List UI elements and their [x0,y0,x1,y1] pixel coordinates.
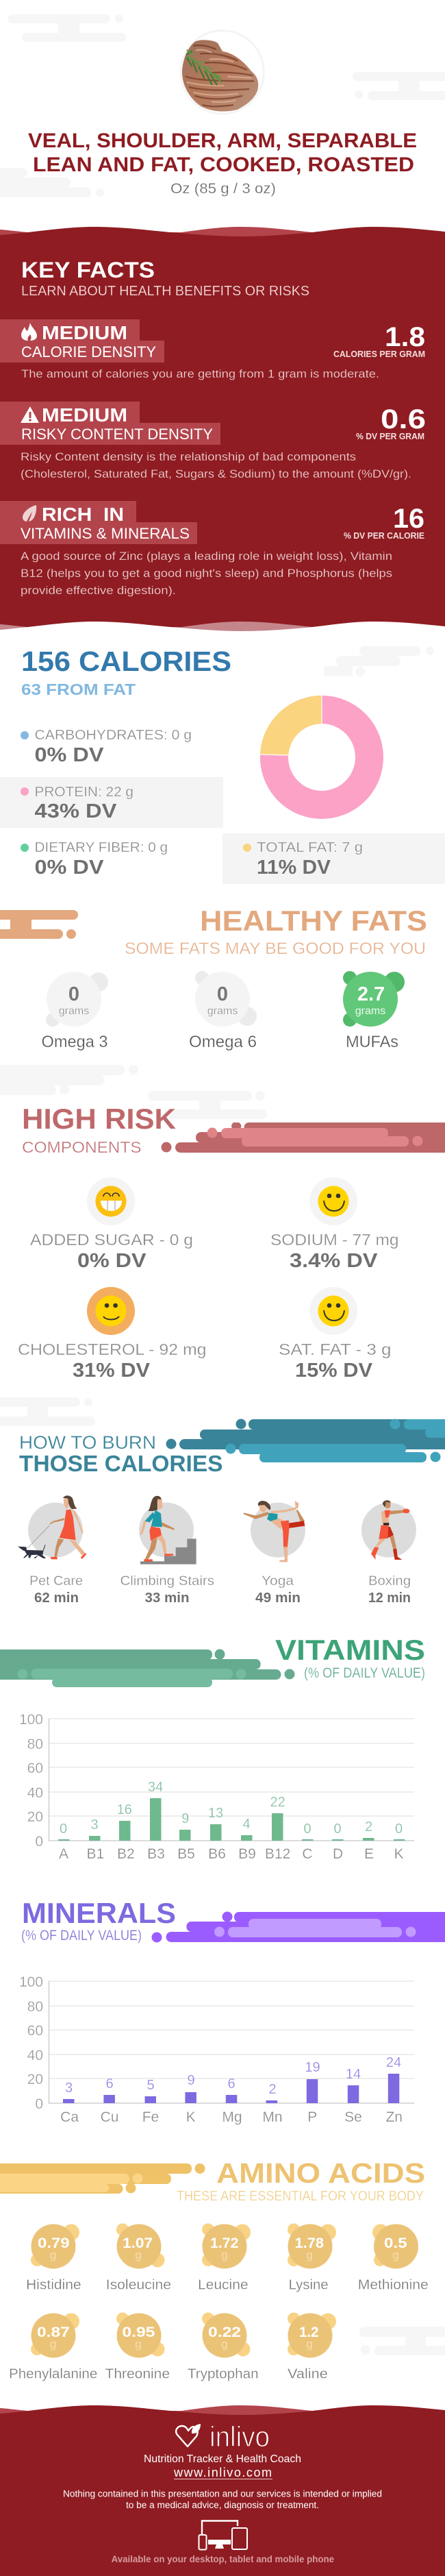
risk item: sodium [270,1177,398,1272]
icon: warning triangle [21,406,39,423]
bar chart: vitamins: 0 [395,1821,403,1837]
stat: mufas: MUFAs [346,1033,398,1051]
bar chart: minerals: 9 [187,2073,195,2088]
amino acid: isoleucine: 1.07 [123,2235,153,2251]
rating: MEDIUM [42,404,127,426]
icon: flame [21,323,37,341]
bar chart: vitamins: 2 [365,1819,372,1835]
bar chart: vitamins: 16 [117,1802,132,1817]
risk item: saturated fat: SAT. FAT - 3 g [279,1340,392,1358]
amino acid: methionine: g [392,2248,399,2261]
description: provide effective digestion). [21,584,176,597]
subheading: (% OF DAILY VALUE) [21,1928,142,1943]
availability note: Available on your desktop, tablet and mobile phone [112,2553,334,2564]
nutrient: dietary fiber: 0% DV [34,857,104,879]
risk item: cholesterol [18,1287,207,1382]
bar chart: minerals: 0 [35,2096,43,2112]
amino acid: phenylalanine: g [50,2338,56,2351]
fact: risky content density [0,402,426,480]
logo: inlivo heart and leaf [176,2420,270,2453]
bar chart: minerals: 40 [27,2048,43,2063]
bar chart: vitamins: B3 [147,1846,165,1862]
bar chart: vitamins: 0 [60,1821,67,1837]
amino acid: histidine: 0.79 [38,2235,70,2251]
fact: calorie density [0,319,425,380]
title [28,130,417,176]
bar chart: vitamins: 34 [148,1780,163,1795]
risk item: cholesterol: CHOLESTEROL - 92 mg [18,1340,207,1358]
subheading: from fat: 63 FROM FAT [21,680,136,698]
amino acid: methionine: Methionine [358,2278,429,2293]
donut chart [260,696,370,805]
stat: mufas [343,971,405,1051]
amino acid: leucine [198,2223,251,2293]
risk item: saturated fat [279,1287,392,1382]
stat: mufas: grams [355,1005,385,1017]
bar chart: minerals: 19 [305,2060,320,2075]
activity: climbing stairs [120,1496,214,1606]
activity: boxing: 12 min [368,1591,411,1606]
unit: CALORIES PER GRAM [333,349,425,359]
icon: woman in yoga pose [244,1501,305,1562]
bar chart: vitamins: B5 [177,1846,195,1862]
risk item: sodium: SODIUM - 77 mg [270,1231,398,1249]
rating: MEDIUM [42,322,127,343]
decorative header shape [152,1912,445,1942]
bar chart: vitamins: B1 [87,1846,104,1862]
icon: smiling emoji [309,1177,357,1225]
bar chart: vitamins: K [394,1846,404,1862]
panel: key facts [0,227,445,641]
amino acid: leucine: 1.72 [210,2235,238,2251]
bar chart: minerals: 100 [19,1974,43,1990]
tagline: Nutrition Tracker & Health Coach [144,2453,301,2465]
heading: vitamins: VITAMINS [275,1634,425,1666]
bar chart: minerals: Se [344,2109,362,2125]
amino acid: tryptophan: g [221,2338,228,2351]
amino acid: threonine: g [135,2338,142,2351]
fact: rich in vitamins and minerals [0,501,424,597]
bar chart: vitamins: 4 [242,1817,251,1832]
nutrient: protein: PROTEIN: 22 g [34,785,134,800]
amino acid: valine [288,2312,336,2382]
heading: healthy fats: HEALTHY FATS [200,905,427,937]
bar chart: minerals: K [186,2109,196,2125]
stat: omega 6: Omega 6 [189,1033,257,1051]
bar chart: vitamins: B9 [238,1846,256,1862]
amino acid: histidine: Histidine [26,2278,81,2293]
bar chart: vitamins: D [333,1846,343,1862]
subheading: COMPONENTS [22,1138,142,1156]
panel: footer [0,2405,445,2576]
nutrient: dietary fiber: DIETARY FIBER: 0 g [34,840,168,855]
value: 0.6 [381,404,426,434]
panel: minerals [19,1897,445,2125]
activity: boxing: Boxing [368,1574,411,1588]
value: 1.8 [385,322,425,352]
bar chart: minerals: 24 [386,2055,401,2070]
food image: grilled veal steak with rosemary [181,31,264,114]
amino acid: isoleucine: Isoleucine [106,2278,171,2293]
amino acid: lysine: 1.78 [295,2235,324,2251]
amino acid: tryptophan: 0.22 [208,2324,241,2340]
description: A good source of Zinc (plays a leading role in weight loss), Vitamin [21,550,392,563]
risk item: cholesterol: 31% DV [73,1360,151,1382]
nutrient: total fat [243,840,363,879]
panel: how to burn those calories [18,1419,445,1606]
bar chart: vitamins: 9 [181,1811,189,1826]
bar chart: minerals: 3 [65,2081,73,2096]
rating: RICH IN [42,504,124,525]
panel: vitamins [0,1634,425,1862]
bar chart: minerals: 2 [268,2082,277,2097]
description: Risky Content density is the relationship of bad components [21,450,356,463]
value: 16 [393,504,424,534]
heading: key facts: KEY FACTS [21,258,155,282]
decorative header shape [162,1123,445,1153]
bar chart: vitamins: 60 [27,1761,43,1776]
icon: smiling emoji [309,1287,357,1335]
activity: pet care: 62 min [34,1591,79,1606]
activity: boxing [361,1500,416,1606]
activity: yoga: 49 min [255,1591,301,1606]
logo: inlivo heart and leaf: inlivo [209,2420,270,2453]
nutrient: carbohydrates: CARBOHYDRATES: 0 g [34,728,192,743]
bar chart: minerals: Mn [262,2109,283,2125]
amino acid: valine: Valine [288,2367,328,2382]
bar chart: minerals: Cu [101,2109,118,2125]
decorative header shape [166,1419,445,1462]
icon: desktop, tablet and phone [199,2520,247,2549]
amino acid: threonine: Threonine [105,2367,170,2382]
amino acid: lysine [288,2223,336,2293]
description: (Cholesterol, Saturated Fat, Sugars & Sodium) to the amount (%DV/gr). [21,467,411,480]
bar chart: vitamins: 0 [35,1834,43,1850]
subheading: (% OF DAILY VALUE) [304,1665,425,1681]
bar chart: minerals: 20 [27,2072,43,2087]
stat: omega 3: grams [59,1005,89,1017]
bar chart: minerals: Zn [385,2109,403,2125]
icon: woman climbing stairs [139,1496,196,1565]
bar chart: vitamins: 80 [27,1737,43,1752]
heading: amino acids: AMINO ACIDS [216,2157,425,2189]
label: VITAMINS & MINERALS [21,525,190,542]
bar chart: vitamins: B12 [265,1846,290,1862]
decorative header shape [0,1649,294,1687]
amino acid: isoleucine: g [135,2248,142,2261]
amino acid: phenylalanine [9,2314,97,2382]
stat: omega 6 [189,971,257,1051]
icon: smiling emoji on orange [87,1287,135,1335]
bar chart: vitamins: 40 [27,1785,43,1801]
serving size: Oz (85 g / 3 oz) [170,181,276,197]
bar chart: minerals: 6 [105,2076,114,2092]
label: CALORIE DENSITY [21,343,156,360]
decorative header shape [0,910,78,939]
activity: climbing stairs: 33 min [145,1591,189,1606]
bar chart: minerals: P [307,2109,317,2125]
amino acid: lysine: Lysine [289,2278,329,2293]
bar chart: minerals: 14 [346,2067,361,2082]
description [21,550,392,597]
nutrient: dietary fiber [21,840,168,879]
icon: woman walking a dog [18,1495,86,1559]
bar chart: minerals: Mg [222,2109,242,2125]
bar chart: minerals: 60 [27,2023,43,2039]
bar chart: vitamins: E [364,1846,374,1862]
icon: leaf [23,505,36,522]
amino acid: leucine: Leucine [198,2278,249,2293]
bar chart: minerals [19,1974,414,2125]
stat: omega 6: 0 [217,983,228,1005]
nutrient: carbohydrates [21,728,192,766]
activity: yoga: Yoga [262,1574,294,1588]
unit: % DV PER GRAM [356,431,424,441]
risk item: sodium: 3.4% DV [290,1250,378,1272]
amino acid: threonine [105,2312,170,2382]
risk item: added sugar: ADDED SUGAR - 0 g [30,1231,193,1249]
amino acid: leucine: g [221,2248,228,2261]
amino acid: isoleucine [106,2223,171,2293]
panel: healthy fats [0,905,427,1051]
amino acid: valine: 1.2 [299,2324,319,2340]
stat: omega 6: grams [207,1005,238,1017]
amino acid: methionine: 0.5 [384,2235,407,2251]
heading: minerals: MINERALS [22,1897,176,1929]
amino acid: methionine [358,2224,429,2293]
heading: those calories: THOSE CALORIES [19,1451,223,1476]
panel: high risk components [18,1103,445,1382]
nutrient: total fat: 11% DV [257,857,331,879]
nutrient: protein: 43% DV [34,800,117,822]
icon: boxer punching [361,1500,416,1560]
bar chart: minerals: 5 [147,2078,155,2093]
bar chart: minerals: 6 [227,2076,236,2092]
nutrient: protein [21,785,134,822]
nutrient: carbohydrates: 0% DV [34,744,104,766]
title: LEAN AND FAT, COOKED, ROASTED [33,154,414,176]
bar chart: minerals: Fe [142,2109,159,2125]
disclaimer [63,2489,382,2510]
amino acid: tryptophan [188,2312,259,2382]
bar chart: vitamins [19,1712,414,1862]
subheading: SOME FATS MAY BE GOOD FOR YOU [125,940,426,958]
bar chart: vitamins: B6 [208,1846,226,1862]
risk item: added sugar: 0% DV [77,1250,147,1272]
activity: pet care: Pet Care [29,1574,83,1588]
activity: pet care [18,1495,86,1606]
amino acid: histidine [26,2224,81,2293]
amino acid: phenylalanine: Phenylalanine [9,2367,97,2382]
label: RISKY CONTENT DENSITY [21,426,213,443]
disclaimer: Nothing contained in this presentation and our services is intended or implied [63,2489,382,2499]
title: VEAL, SHOULDER, ARM, SEPARABLE [28,130,417,152]
amino acid: tryptophan: Tryptophan [188,2367,259,2382]
bar chart: minerals: Ca [60,2109,79,2125]
nutrient: total fat: TOTAL FAT: 7 g [257,840,363,855]
subheading: LEARN ABOUT HEALTH BENEFITS OR RISKS [21,284,309,299]
bar chart: vitamins: 20 [27,1809,43,1825]
panel: amino acids [0,2157,429,2382]
panel: calories [0,646,445,884]
bar chart: vitamins: 3 [90,1817,99,1832]
stat: omega 3 [41,972,108,1051]
stat: omega 3: 0 [68,983,79,1005]
activity: climbing stairs: Climbing Stairs [120,1574,214,1588]
amino acid: histidine: g [50,2248,56,2261]
bar chart: vitamins: B2 [117,1846,135,1862]
description: The amount of calories you are getting from 1 gram is moderate. [21,367,379,380]
description: B12 (helps you to get a good night's sleep) and Phosphorus (helps [21,567,392,580]
icon: grinning emoji [87,1177,135,1225]
amino acid: phenylalanine: 0.87 [37,2324,70,2340]
stat: mufas: 2.7 [357,983,385,1005]
stat: omega 3: Omega 3 [41,1033,108,1051]
amino acid: lysine: g [306,2248,313,2261]
subheading: THESE ARE ESSENTIAL FOR YOUR BODY [177,2189,424,2204]
heading: how to burn: HOW TO BURN [19,1432,156,1453]
amino acid: valine: g [306,2338,313,2351]
bar chart: minerals: 80 [27,1999,43,2015]
risk item: added sugar [30,1177,193,1272]
bar chart: vitamins: 13 [208,1806,223,1821]
website link: www.inlivo.com [173,2466,272,2479]
bar chart: vitamins: 0 [303,1821,312,1837]
bar chart: vitamins: A [59,1846,68,1862]
bar chart: vitamins: 100 [19,1712,43,1728]
risk item: saturated fat: 15% DV [295,1360,373,1382]
heading: high risk: HIGH RISK [22,1103,176,1135]
bar chart: vitamins: 22 [270,1795,285,1810]
amino acid: threonine: 0.95 [122,2324,155,2340]
activity: yoga [244,1501,305,1606]
heading: calories: 156 CALORIES [21,646,231,677]
disclaimer: to be a medical advice, diagnosis or treatment. [126,2500,319,2510]
bar chart: vitamins: 0 [333,1821,342,1837]
bar chart: vitamins: C [302,1846,313,1862]
decorative header shape [0,2163,205,2194]
description [21,450,411,480]
unit: % DV PER CALORIE [344,530,424,541]
